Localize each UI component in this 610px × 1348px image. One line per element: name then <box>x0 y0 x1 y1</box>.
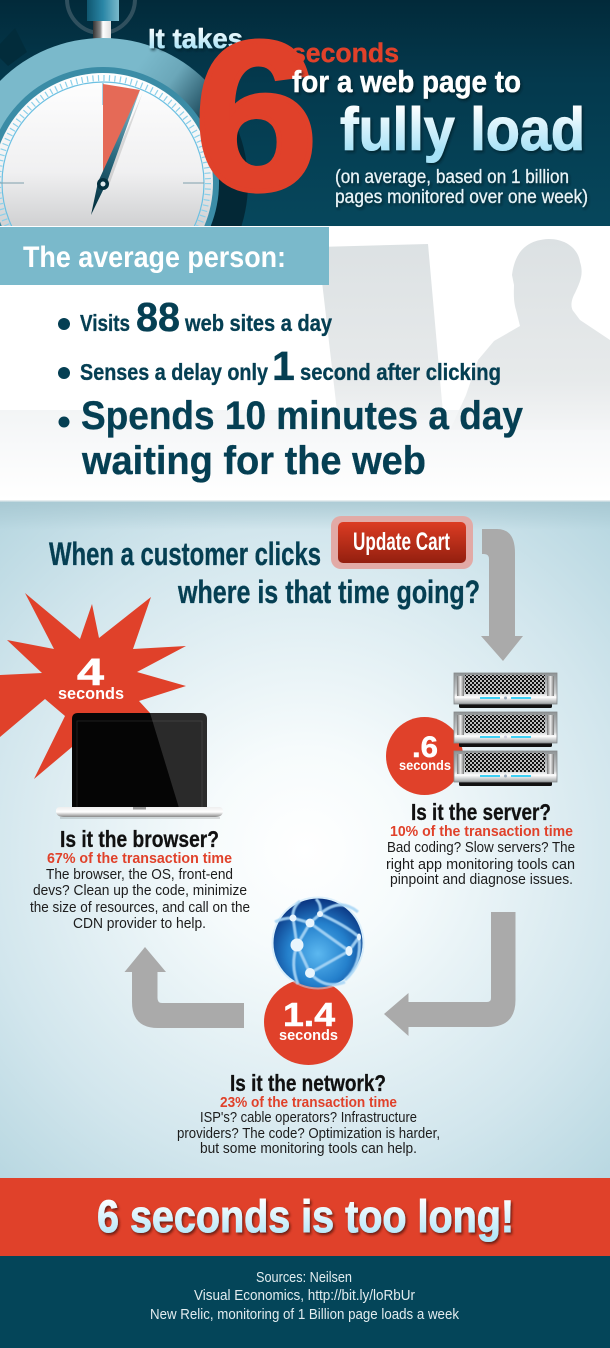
bullet: visits 88 sites: web sites a day <box>184 310 332 336</box>
arrow: server to network <box>384 912 516 1036</box>
circle: network time: 1.4 <box>283 996 336 1033</box>
text: is it the server: 10% of the transaction time <box>390 823 573 840</box>
heading: when a customer clicks: When a customer clicks <box>49 536 321 572</box>
panel: header <box>0 0 610 226</box>
arrow: button to server <box>481 529 523 661</box>
button: update cart <box>331 516 473 569</box>
bullet: senses delay: Senses a delay only <box>80 359 268 385</box>
subtitle <box>335 167 588 208</box>
panel: sources: Visual Economics, http://bit.ly/loRbUr <box>194 1288 415 1304</box>
text: is it the network: 23% of the transaction time <box>220 1094 397 1111</box>
button: update cart: Update Cart <box>353 528 450 556</box>
text: is it the browser: Is it the browser? <box>60 826 219 852</box>
subtitle: (on average, based on 1 billion <box>335 167 569 188</box>
text: is it the network: but some monitoring tools can help. <box>200 1141 417 1157</box>
text: is it the network: providers? The code? Optimization is harder, <box>177 1126 440 1142</box>
text: is it the server: right app monitoring tools can <box>386 857 575 873</box>
text: is it the browser: The browser, the OS, front-end <box>46 867 233 883</box>
label: 4 seconds: 4 <box>77 652 104 694</box>
heading: where is that time going: where is that time going? <box>177 574 480 610</box>
heading band: The average person: <box>23 241 286 274</box>
subtitle: pages monitored over one week) <box>335 187 588 208</box>
heading: seconds: seconds <box>291 38 399 68</box>
panel: sources: Sources: Neilsen <box>256 1270 352 1286</box>
panel: the average person <box>0 226 610 500</box>
bullet: visits 88 sites <box>58 294 332 340</box>
text: is it the browser: devs? Clean up the code, minimize <box>33 883 247 899</box>
text: is it the browser: CDN provider to help. <box>73 916 206 932</box>
text: is it the server: pinpoint and diagnose issues. <box>390 872 573 888</box>
heading band <box>0 227 329 285</box>
banner: 6 seconds is too long: 6 seconds is too long! <box>97 1191 514 1242</box>
panel: sources <box>0 1256 610 1348</box>
text: is it the browser: 67% of the transaction time <box>47 850 232 867</box>
label: 4 seconds <box>58 652 124 703</box>
bullet: spends 10 minutes: Spends 10 minutes a day <box>81 394 524 438</box>
bullet: visits 88 sites: 88 <box>136 294 180 340</box>
bullet: spends 10 minutes <box>58 394 524 483</box>
text: is it the server: Is it the server? <box>411 799 551 825</box>
heading: fully load: fully load <box>340 96 585 163</box>
icon: stopwatch <box>0 0 248 226</box>
arrow: network to browser <box>124 947 244 1028</box>
text: is it the network <box>177 1070 440 1157</box>
bullet: senses delay <box>58 343 501 389</box>
panel: sources: New Relic, monitoring of 1 Billion page loads a week <box>150 1307 460 1323</box>
text: is it the server: Bad coding? Slow servers? The <box>387 840 575 856</box>
bullet: spends 10 minutes: waiting for the web <box>81 439 426 483</box>
label: .6 seconds <box>399 731 451 773</box>
label: .6 seconds: seconds <box>399 757 451 773</box>
starburst: browser time <box>0 593 186 779</box>
heading: it takes: It takes <box>148 23 243 54</box>
circle: network time: seconds <box>279 1027 338 1044</box>
banner: 6 seconds is too long <box>0 1178 610 1256</box>
icon: laptop <box>56 713 223 819</box>
text: is it the browser: the size of resources, and call on the <box>30 900 250 916</box>
text: is it the network: ISP's? cable operators? Infrastructure <box>200 1110 417 1126</box>
label: 4 seconds: seconds <box>58 684 124 703</box>
bullet: senses delay: second after clicking <box>300 359 501 385</box>
label: .6 seconds: .6 <box>412 731 438 764</box>
circle: network time <box>264 979 353 1065</box>
text: is it the network: Is it the network? <box>230 1070 386 1096</box>
silhouette: person at monitor <box>318 239 610 430</box>
panel: where is the time going <box>0 500 610 1178</box>
big number 6: 6 <box>194 0 318 234</box>
text: is it the browser <box>30 826 250 932</box>
icon: globe <box>272 896 364 990</box>
heading: for a web page to: for a web page to <box>292 64 521 99</box>
text: is it the server <box>386 799 575 888</box>
bullet: senses delay: 1 <box>272 343 295 389</box>
icon: server stack <box>454 673 557 786</box>
bullet: visits 88 sites: Visits <box>80 310 130 336</box>
circle: server time <box>386 717 463 795</box>
